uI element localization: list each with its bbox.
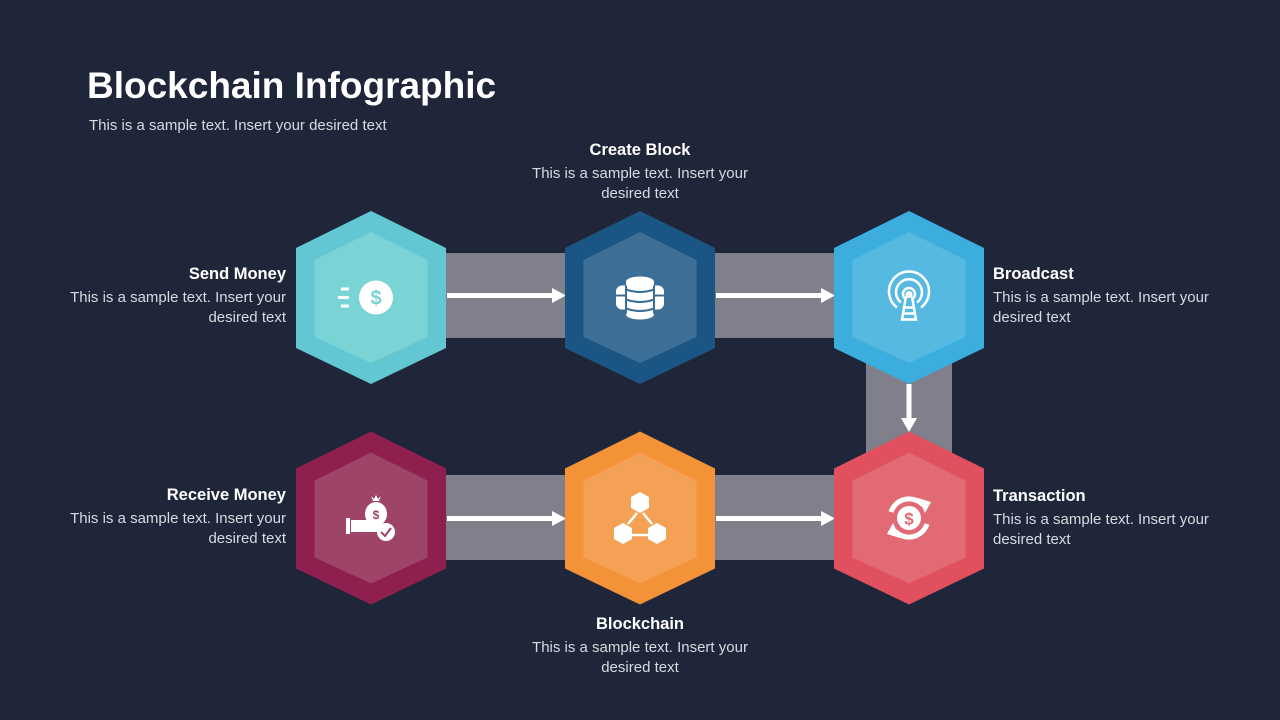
connector bars xyxy=(440,253,952,560)
label: create block: This is a sample text. Insert your desired text xyxy=(532,165,748,202)
hex: receive money xyxy=(296,432,446,604)
label: receive money: Receive Money xyxy=(167,486,286,504)
label: send money: Send Money xyxy=(189,265,286,283)
hex: blockchain xyxy=(565,432,715,604)
label: create block xyxy=(532,141,748,202)
label: receive money xyxy=(70,486,286,547)
hex: send money xyxy=(296,211,446,384)
title: Blockchain Infographic xyxy=(87,65,496,106)
label: receive money: This is a sample text. Insert your desired text xyxy=(70,510,286,547)
label: send money: This is a sample text. Insert your desired text xyxy=(70,289,286,326)
hex: send money: $ xyxy=(370,288,382,310)
label: broadcast: This is a sample text. Insert your desired text xyxy=(993,289,1209,326)
label: blockchain xyxy=(532,615,748,676)
label: broadcast xyxy=(993,265,1209,326)
subtitle: This is a sample text. Insert your desired text xyxy=(89,117,387,134)
label: transaction: Transaction xyxy=(993,487,1086,505)
label: transaction xyxy=(993,487,1209,548)
label: send money xyxy=(70,265,286,326)
label: blockchain: This is a sample text. Insert your desired text xyxy=(532,639,748,676)
hex: receive money: $ xyxy=(373,508,380,522)
label: blockchain: Blockchain xyxy=(596,615,684,633)
hex: transaction: $ xyxy=(904,510,914,528)
hex: create block xyxy=(565,211,715,384)
label: create block: Create Block xyxy=(590,141,690,159)
label: transaction: This is a sample text. Insert your desired text xyxy=(993,511,1209,548)
label: broadcast: Broadcast xyxy=(993,265,1074,283)
arrows xyxy=(447,288,917,526)
hex: transaction xyxy=(834,432,984,604)
hex: broadcast xyxy=(834,211,984,384)
